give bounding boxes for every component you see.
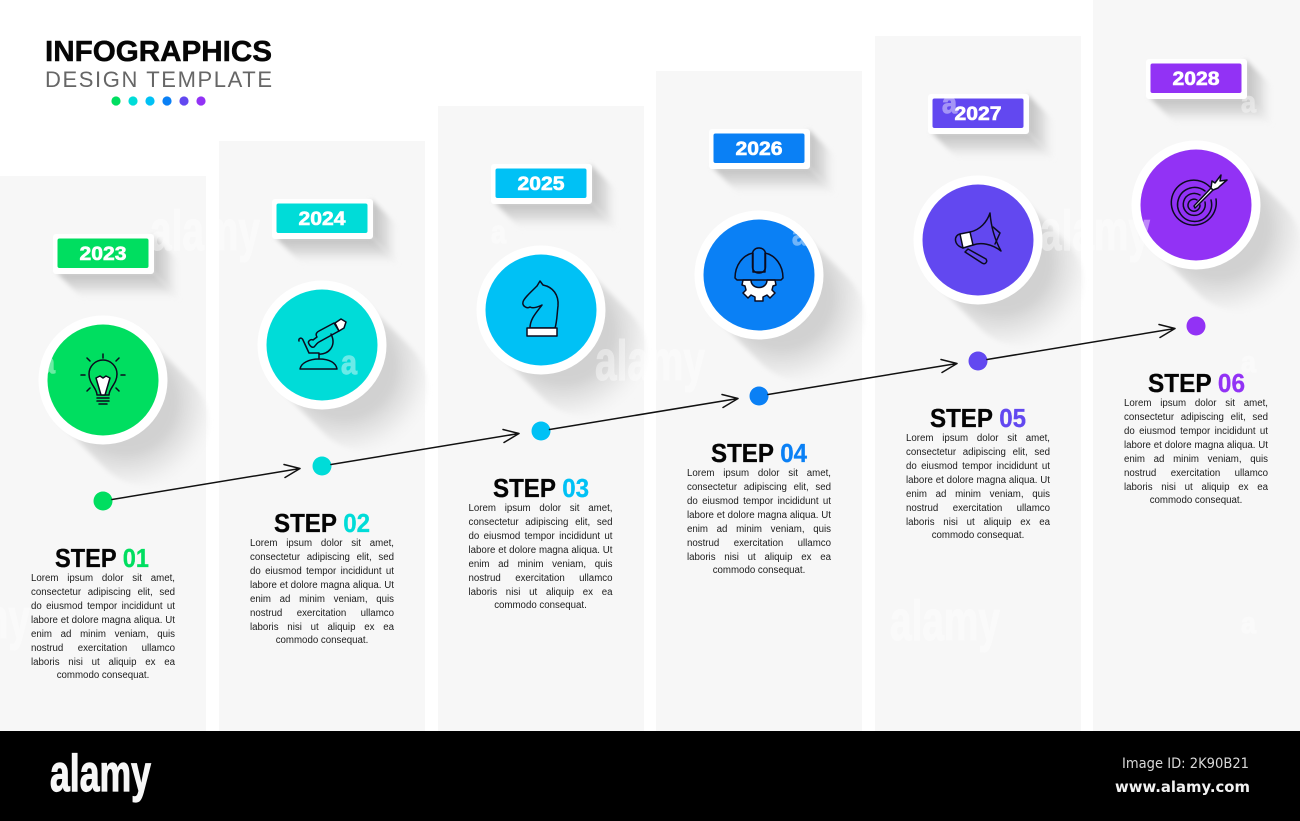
step 1 text: Lorem ipsum dolor sit amet, xyxy=(31,573,175,584)
step 6 text: enim ad minim veniam, quis xyxy=(1124,454,1268,465)
step 1 text: enim ad minim veniam, quis xyxy=(31,629,175,640)
step 4 text: laboris nisi ut aliquip ex ea xyxy=(687,552,831,563)
arrow 3 to 4 xyxy=(550,394,738,430)
step 3 text: Lorem ipsum dolor sit amet, xyxy=(468,503,612,514)
step 2 dot xyxy=(312,456,332,476)
stock watermarks: a xyxy=(40,347,55,380)
step 2 text xyxy=(250,538,394,646)
year badge 2023 xyxy=(53,234,180,300)
year badge 2027: 2027 xyxy=(954,104,1002,125)
step 3 text: do eiusmod tempor incididunt ut xyxy=(468,531,612,542)
step 2 text: do eiusmod tempor incididunt ut xyxy=(250,566,394,577)
step 5 text xyxy=(906,433,1050,541)
step 3 dot xyxy=(531,422,550,440)
palette dots xyxy=(111,96,206,106)
step 5 text: labore et dolore magna aliqua. Ut xyxy=(906,475,1050,486)
year badge 2026 xyxy=(709,129,836,195)
step 1 text: consectetur adipiscing elit, sed xyxy=(31,587,175,598)
step 2 text: commodo consequat. xyxy=(276,635,368,646)
step 3 text xyxy=(468,503,612,611)
icon circle: microscope xyxy=(258,280,386,410)
step 1 text xyxy=(31,573,175,681)
step 1 heading: STEP 01 xyxy=(55,543,149,573)
footer logo: alamy xyxy=(50,745,151,803)
year badge 2025 xyxy=(490,164,618,230)
step 6 text: laboris nisi ut aliquip ex ea xyxy=(1124,482,1268,493)
step 1 text: nostrud exercitation ullamco xyxy=(31,643,175,654)
year badge 2028 xyxy=(1146,59,1273,125)
footer bar xyxy=(0,731,1300,821)
stock watermarks: a xyxy=(792,219,807,252)
step 3 text: labore et dolore magna aliqua. Ut xyxy=(468,545,612,556)
step 4 text xyxy=(687,468,831,576)
step 4 dot xyxy=(750,386,768,406)
step 5 text: do eiusmod tempor incididunt ut xyxy=(906,461,1050,472)
step 2 text: laboris nisi ut aliquip ex ea xyxy=(250,622,394,633)
step 4 text: do eiusmod tempor incididunt ut xyxy=(687,496,831,507)
arrow 5 to 6 xyxy=(987,324,1175,360)
step 1 text: laboris nisi ut aliquip ex ea xyxy=(31,657,175,668)
step 5 text: consectetur adipiscing elit, sed xyxy=(906,447,1050,458)
step 1 text: commodo consequat. xyxy=(57,670,149,681)
year badge 2028: 2028 xyxy=(1172,69,1220,90)
stock watermarks: a xyxy=(341,344,358,382)
step 1 dot xyxy=(94,492,112,510)
step 6 text: Lorem ipsum dolor sit amet, xyxy=(1124,398,1268,409)
step 1 text: labore et dolore magna aliqua. Ut xyxy=(31,615,175,626)
step 4 text: Lorem ipsum dolor sit amet, xyxy=(687,468,831,479)
step 3 text: laboris nisi ut aliquip ex ea xyxy=(468,587,612,598)
stock watermarks: alamy xyxy=(1040,199,1150,263)
step 2 heading: STEP 02 xyxy=(274,508,370,538)
title: infographics: INFOGRAPHICS xyxy=(45,36,272,68)
step 3 text: enim ad minim veniam, quis xyxy=(468,559,612,570)
step 6 text: commodo consequat. xyxy=(1150,495,1242,506)
step 2 text: Lorem ipsum dolor sit amet, xyxy=(250,538,394,549)
year badge 2025: 2025 xyxy=(517,174,564,195)
arrow 4 to 5 xyxy=(768,360,957,394)
step 5 text: nostrud exercitation ullamco xyxy=(906,503,1050,514)
icon circle: light bulb xyxy=(38,316,168,444)
stock watermarks: a xyxy=(942,87,957,120)
step 5 text: commodo consequat. xyxy=(932,530,1024,541)
panel: step 4 xyxy=(656,71,862,731)
arrow 2 to 3 xyxy=(331,430,519,464)
step 3 text: nostrud exercitation ullamco xyxy=(468,573,612,584)
stock watermarks: a xyxy=(1241,346,1256,379)
year badge 2024: 2024 xyxy=(298,209,346,230)
step 6 dot xyxy=(1186,316,1206,336)
year badge 2027 xyxy=(928,94,1055,160)
step 4 text: enim ad minim veniam, quis xyxy=(687,524,831,535)
panel: step 3 xyxy=(438,106,644,731)
step 6 text: nostrud exercitation ullamco xyxy=(1124,468,1268,479)
panel: step 1 xyxy=(0,176,206,731)
step 2 text: consectetur adipiscing elit, sed xyxy=(250,552,394,563)
step 4 text: labore et dolore magna aliqua. Ut xyxy=(687,510,831,521)
step 4 text: nostrud exercitation ullamco xyxy=(687,538,831,549)
icon circle: megaphone xyxy=(914,176,1042,304)
icon circle: helmet and gear xyxy=(694,210,824,340)
step 4 heading: STEP 04 xyxy=(711,438,807,468)
stock watermarks: alamy xyxy=(150,199,260,263)
step 4 text: commodo consequat. xyxy=(713,565,805,576)
title block xyxy=(45,36,272,106)
icon circle: chess knight xyxy=(476,246,605,374)
year badge 2026: 2026 xyxy=(736,139,782,160)
step 6 text: labore et dolore magna aliqua. Ut xyxy=(1124,440,1268,451)
stock watermarks: a xyxy=(1241,607,1256,640)
panel: step 2 xyxy=(219,141,425,731)
step 5 text: enim ad minim veniam, quis xyxy=(906,489,1050,500)
arrow 1 to 2 xyxy=(112,464,300,500)
step 3 heading: STEP 03 xyxy=(492,473,588,503)
step 5 heading: STEP 05 xyxy=(930,403,1026,433)
step 3 text: consectetur adipiscing elit, sed xyxy=(468,517,612,528)
icon circle: target and dart xyxy=(1132,140,1260,270)
stock watermarks: a xyxy=(1241,86,1256,119)
subtitle: DESIGN TEMPLATE xyxy=(45,67,272,92)
stock watermarks: alamy xyxy=(595,329,705,393)
step 5 dot xyxy=(968,352,988,370)
website: www.alamy.com xyxy=(1115,778,1250,796)
step 2 text: labore et dolore magna aliqua. Ut xyxy=(250,580,394,591)
step 5 text: Lorem ipsum dolor sit amet, xyxy=(906,433,1050,444)
stock watermarks: a xyxy=(491,214,506,250)
step 6 text xyxy=(1124,398,1268,506)
step 5 text: laboris nisi ut aliquip ex ea xyxy=(906,517,1050,528)
step 1 text: do eiusmod tempor incididunt ut xyxy=(31,601,175,612)
year badge 2024 xyxy=(272,199,399,265)
step 2 text: enim ad minim veniam, quis xyxy=(250,594,394,605)
stock watermarks: alamy xyxy=(890,589,1000,653)
step 4 text: consectetur adipiscing elit, sed xyxy=(687,482,831,493)
step 3 text: commodo consequat. xyxy=(494,600,587,611)
step 6 heading: STEP 06 xyxy=(1148,368,1245,398)
step 6 text: consectetur adipiscing elit, sed xyxy=(1124,412,1268,423)
step 6 text: do eiusmod tempor incididunt ut xyxy=(1124,426,1268,437)
step 2 text: nostrud exercitation ullamco xyxy=(250,608,394,619)
image id: Image ID: 2K90B21 xyxy=(1122,756,1249,772)
panel: step 5 xyxy=(875,36,1081,731)
year badge 2023: 2023 xyxy=(80,244,126,265)
panel: step 6 xyxy=(1093,0,1300,731)
